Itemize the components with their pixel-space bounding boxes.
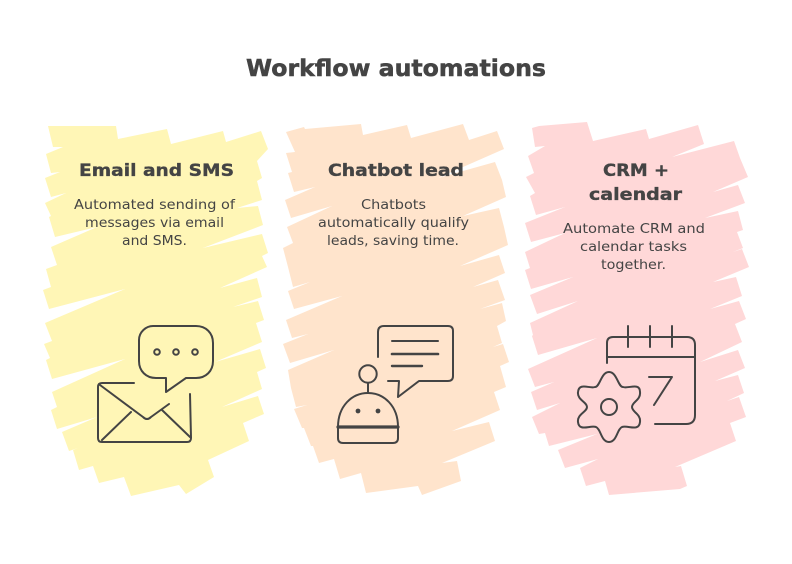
description (74, 198, 235, 249)
description (318, 198, 469, 249)
title: Workflow automations (246, 56, 546, 82)
yellow scribble background (43, 126, 268, 496)
icon: robot with speech bubble (338, 326, 453, 443)
description: calendar tasks (580, 240, 687, 255)
description: together. (601, 258, 666, 273)
heading: Email and SMS (79, 161, 234, 181)
heading (589, 161, 683, 205)
heading: Chatbot lead (328, 161, 464, 181)
description (563, 222, 705, 273)
panel: email and SMS (43, 126, 268, 496)
peach scribble background (283, 124, 509, 495)
pink scribble background (525, 122, 749, 495)
heading: calendar (589, 185, 683, 205)
description: automatically qualify (318, 216, 469, 231)
description: Automated sending of (74, 198, 235, 213)
description: messages via email (85, 216, 224, 231)
description: and SMS. (122, 234, 187, 249)
description: leads, saving time. (327, 234, 459, 249)
icon: envelope with speech bubble (98, 326, 213, 442)
panel: chatbot lead (283, 124, 509, 495)
description: Automate CRM and (563, 222, 705, 237)
icon: calendar with gear (578, 326, 695, 442)
description: Chatbots (361, 198, 426, 213)
heading: CRM + (603, 161, 669, 181)
panel: CRM + calendar (525, 122, 749, 495)
